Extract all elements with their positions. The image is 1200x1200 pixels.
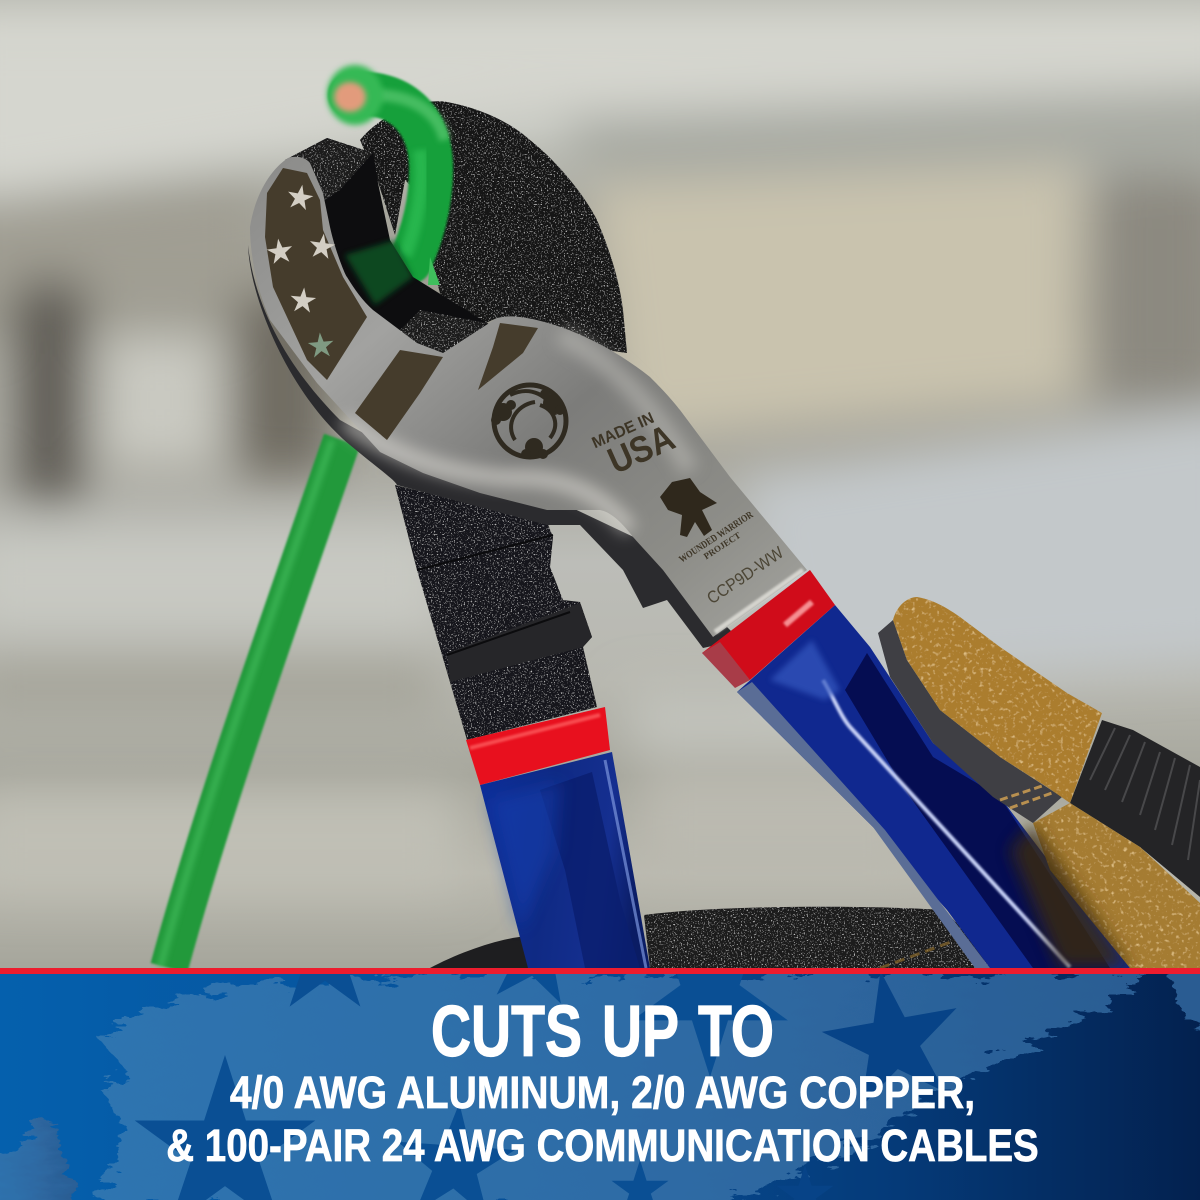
distressed brush and stars texture xyxy=(0,974,1200,1200)
subheading line one: 4/0 AWG ALUMINUM, 2/0 AWG COPPER, xyxy=(230,1067,975,1118)
green cable lower run xyxy=(160,440,342,968)
red rule xyxy=(0,968,1200,974)
front jaw rim xyxy=(248,245,740,648)
front jaw steel body xyxy=(250,157,807,637)
engraved model number: CCP9D-WW xyxy=(703,543,787,608)
engraved Made in USA mark: USA xyxy=(602,417,681,482)
tool pouch edge xyxy=(430,907,995,968)
headline: CUTS UP TO xyxy=(431,992,774,1072)
engraved Made in USA mark xyxy=(590,406,681,485)
green cable loop through the jaws xyxy=(327,65,445,285)
engraved flag stripes and stars xyxy=(265,168,538,440)
left handle xyxy=(466,707,650,968)
engraved Wounded Warrior Project mark: WOUNDED WARRIOR xyxy=(677,509,756,565)
front jaw dark cutting face xyxy=(285,138,503,365)
engraved wreath logo xyxy=(491,385,566,459)
glove xyxy=(878,597,1200,968)
engraved Wounded Warrior Project mark xyxy=(660,478,756,565)
engraved Wounded Warrior Project mark: PROJECT xyxy=(702,530,742,561)
engraved Made in USA mark: MADE IN xyxy=(590,410,657,452)
rear jaw and lower jaw xyxy=(360,101,627,740)
banner xyxy=(0,968,1200,1200)
right handle xyxy=(702,570,1130,968)
subheading line two: & 100-PAIR 24 AWG COMMUNICATION CABLES xyxy=(166,1120,1039,1171)
